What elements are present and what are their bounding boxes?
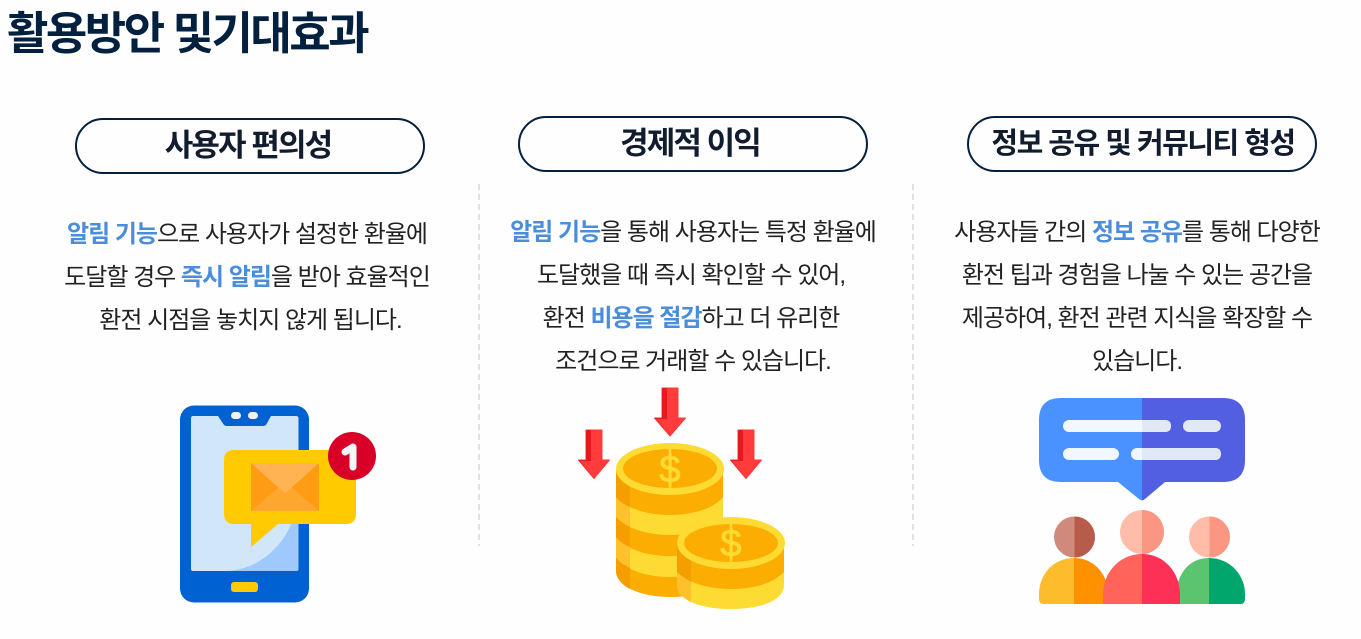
coin stack: large: $ [659, 449, 681, 491]
text block: user convenience: 알림 기능으로 사용자가 설정한 환율에 [67, 221, 427, 248]
pill heading: user convenience: 사용자 편의성 [165, 128, 331, 163]
pill heading: economic benefit [518, 116, 868, 172]
text block: information sharing: 제공하여, 환전 관련 지식을 확장할 수 [962, 305, 1312, 332]
icon: coin stacks with red arrows [578, 388, 785, 609]
pill heading: information sharing and community: 정보 공유 및 커뮤니티 형성 [991, 128, 1295, 160]
text block: information sharing [954, 219, 1320, 375]
text block: economic benefit [510, 219, 876, 375]
coin stack: small [677, 517, 785, 609]
coin stack: small: $ [720, 523, 742, 565]
pill heading: user convenience [75, 118, 425, 174]
arrow: right [730, 430, 762, 478]
title: 활용방안 및기대효과 [7, 8, 367, 59]
text block: information sharing: 있습니다. [1092, 348, 1182, 375]
text block: information sharing: 환전 팁과 경험을 나눌 수 있는 공간을 [962, 262, 1312, 289]
text block: economic benefit: 환전 비용을 절감하고 더 유리한 [543, 305, 839, 332]
text block: user convenience: 환전 시점을 놓치지 않게 됩니다. [99, 307, 402, 334]
text block: economic benefit: 알림 기능을 통해 사용자는 특정 환율에 [510, 219, 876, 246]
pill heading: economic benefit: 경제적 이익 [620, 126, 760, 161]
text block: economic benefit: 도달했을 때 즉시 확인할 수 있어, [537, 262, 845, 289]
text block: information sharing: 사용자들 간의 정보 공유를 통해 다양한 [954, 219, 1320, 246]
text block: economic benefit: 조건으로 거래할 수 있습니다. [555, 348, 831, 375]
text block: user convenience: 도달할 경우 즉시 알림을 받아 효율적인 [64, 264, 430, 291]
arrow: top [654, 388, 686, 436]
icon: phone with message notification [180, 406, 376, 602]
icon: speech bubble above three people [1039, 398, 1245, 604]
arrow: left [578, 430, 610, 478]
pill heading: information sharing and community [967, 116, 1317, 172]
coin stack: large [616, 443, 724, 597]
text block: user convenience [64, 221, 430, 334]
